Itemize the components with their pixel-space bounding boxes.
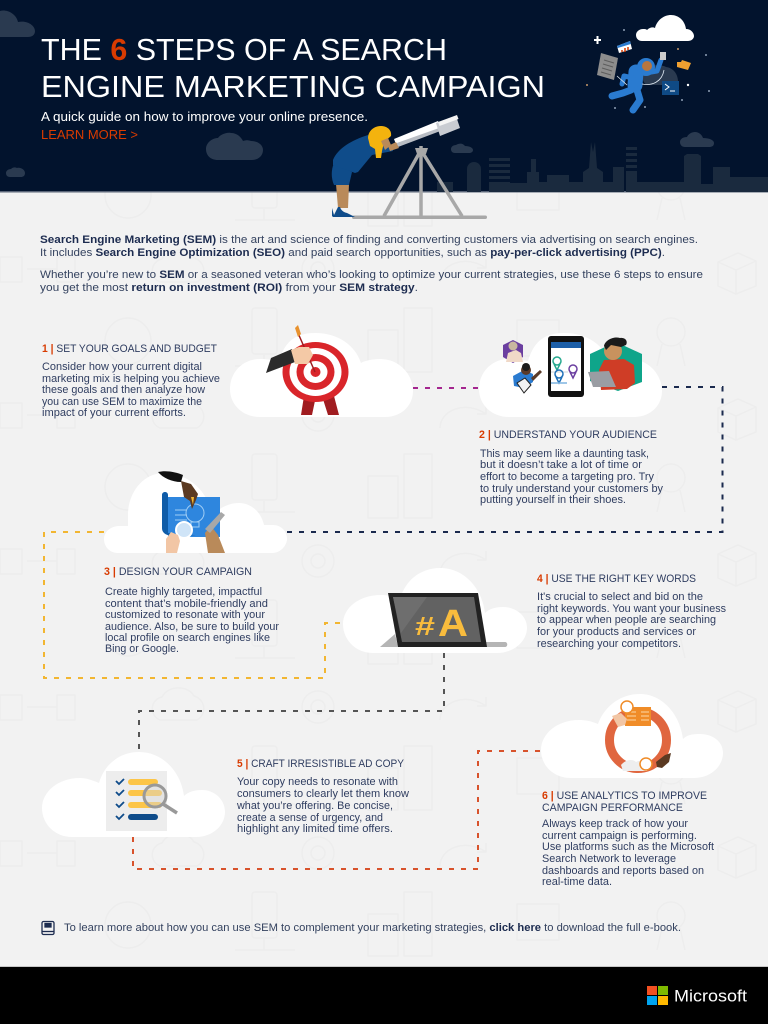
step 5: cloud and ad copy checklist icon xyxy=(42,752,225,837)
intro paragraph: Search Engine Marketing (SEM) is the art and science of finding and converting customers via advertising on search engines. xyxy=(40,234,698,246)
step 1: text: marketing mix is helping you achieve xyxy=(42,373,220,385)
step 6: text: current campaign is performing. xyxy=(542,830,697,842)
step 6: text xyxy=(542,790,714,888)
title: ENGINE MARKETING CAMPAIGN xyxy=(41,69,545,104)
subtitle: A quick guide on how to improve your online presence. xyxy=(41,109,368,124)
step 5: text: highlight any limited time offers. xyxy=(237,823,393,835)
step 6: text: CAMPAIGN PERFORMANCE xyxy=(542,802,683,814)
connector: purple dashes step 1 to 2 xyxy=(413,387,479,389)
step 2: text: putting yourself in their shoes. xyxy=(480,494,626,506)
step 1: text: you can use SEM to maximize the xyxy=(42,396,202,408)
step 3: cloud and blueprint icon xyxy=(104,471,287,553)
intro paragraph xyxy=(40,234,703,294)
step 2: cloud and audience icon xyxy=(479,333,662,417)
step 1: cloud and target icon xyxy=(230,325,413,417)
step 4: cloud and keyword tablet icon: A xyxy=(438,603,468,645)
illustration: astronaut with floating icons xyxy=(586,15,710,110)
skyline xyxy=(437,142,768,192)
step 3: text: content that’s mobile-friendly and xyxy=(105,598,268,610)
icon: book xyxy=(42,922,54,934)
step 3: text: audience. Also, be sure to build your xyxy=(105,621,279,633)
step 1: text: 1 | SET YOUR GOALS AND BUDGET xyxy=(42,343,217,355)
intro paragraph: Whether you’re new to SEM or a seasoned veteran who’s looking to optimize your current strategies, use these 6 steps to ensure xyxy=(40,269,703,281)
step 4: cloud and keyword tablet icon: # xyxy=(415,611,436,641)
step 3: text: customized to resonate with your xyxy=(105,609,265,621)
learn more link: LEARN MORE > xyxy=(41,128,138,142)
connector: grey dashes step 4 to 5 xyxy=(139,653,444,752)
intro paragraph: It includes Search Engine Optimization (SEO) and paid search opportunities, such as pay-per-click advertising (PPC) . xyxy=(40,247,665,259)
step 3: text: 3 | DESIGN YOUR CAMPAIGN xyxy=(104,566,252,578)
step 5: text: 5 | CRAFT IRRESISTIBLE AD COPY xyxy=(237,758,405,770)
step 6: text: real-time data. xyxy=(542,876,612,888)
step 4: text: right keywords. You want your business xyxy=(537,603,726,615)
step 4: text: researching your competitors. xyxy=(537,638,681,650)
step 1: text: these goals and then analyze how xyxy=(42,384,205,396)
illustration: woman with telescope xyxy=(332,115,487,219)
step 1: text: Consider how your current digital xyxy=(42,361,202,373)
title xyxy=(41,32,545,104)
step 3: text: Create highly targeted, impactful xyxy=(105,586,262,598)
step 4: text: It's crucial to select and bid on the xyxy=(537,591,703,603)
step 2: text xyxy=(479,429,664,506)
intro paragraph: you get the most return on investment (ROI) from your SEM strategy . xyxy=(40,282,418,294)
step 1: text xyxy=(42,343,220,419)
connector: yellow dashes step 3 to 4 xyxy=(44,532,343,678)
step 2: text: effort to become a targeting pro. Try xyxy=(480,471,655,483)
microsoft logo xyxy=(647,986,747,1006)
faint icon pattern xyxy=(0,192,768,967)
background clouds xyxy=(0,10,714,177)
step 5: text: create a sense of urgency, and xyxy=(237,812,383,824)
step 6: text: dashboards and reports based on xyxy=(542,865,704,877)
step 2: text: 2 | UNDERSTAND YOUR AUDIENCE xyxy=(479,429,657,441)
microsoft logo: Microsoft xyxy=(674,986,747,1006)
step 4: text: to appear when people are searching xyxy=(537,614,716,626)
connector: navy dashes step 2 to 3 xyxy=(287,387,722,532)
step 4: text xyxy=(537,573,726,650)
step 3: text xyxy=(104,566,279,655)
step 6: text: Always keep track of how your xyxy=(542,818,688,830)
woman figure xyxy=(332,126,399,217)
header banner xyxy=(0,0,768,192)
step 1: text: impact of your current efforts. xyxy=(42,407,186,419)
step 2: text: but it doesn’t take a lot of time or xyxy=(480,459,642,471)
step 2: text: to truly understand your customers by xyxy=(480,483,664,495)
step 4: cloud and keyword tablet icon xyxy=(343,568,527,653)
connector: orange dashes step 5 to 6 xyxy=(133,751,541,869)
title: THE 6 STEPS OF A SEARCH xyxy=(41,32,447,67)
step 6: cloud and analytics cycle icon xyxy=(541,694,723,778)
step 4: text: 4 | USE THE RIGHT KEY WORDS xyxy=(537,573,696,585)
step 5: text: consumers to clearly let them know xyxy=(237,788,409,800)
step 3: text: Bing or Google. xyxy=(105,643,179,655)
step 6: text: 6 | USE ANALYTICS TO IMPROVE xyxy=(542,790,707,802)
call to action text: To learn more about how you can use SEM to complement your marketing strategies, click here to download the full e-book. xyxy=(64,922,681,934)
step 5: text: what you’re offering. Be concise, xyxy=(236,800,393,812)
step 4: text: for your products and services or xyxy=(537,626,696,638)
step 3: text: local profile on search engines like xyxy=(105,632,270,644)
footer bar xyxy=(0,966,768,1024)
step 5: text xyxy=(236,758,409,835)
step 2: text: This may seem like a daunting task, xyxy=(480,448,649,460)
step 6: text: Search Network to leverage xyxy=(542,853,676,865)
step 6: text: Use platforms such as the Microsoft xyxy=(542,841,714,853)
step 5: text: Your copy needs to resonate with xyxy=(237,776,398,788)
